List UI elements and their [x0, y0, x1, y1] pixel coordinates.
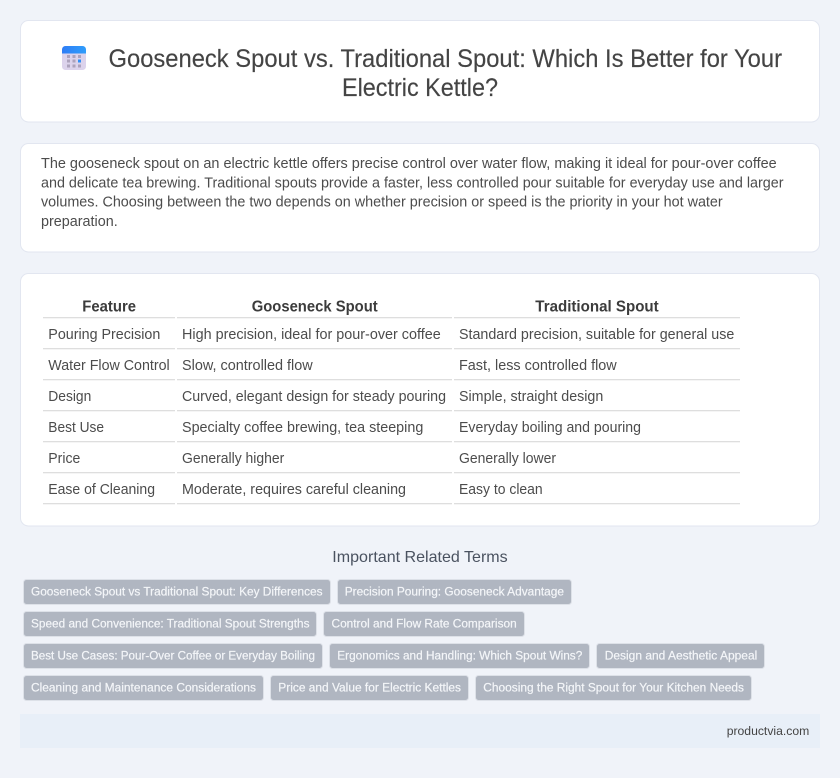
footer — [20, 714, 820, 748]
table row: price — [43, 451, 740, 473]
table row: design: Simple, straight design — [459, 389, 603, 405]
tag: price and value — [270, 676, 468, 700]
tag: design and aesthetic appeal — [596, 644, 764, 668]
table row: water flow control: Fast, less controlled flow — [459, 358, 617, 374]
panel: comparison table — [20, 274, 820, 526]
tag: cleaning and maintenance — [24, 676, 264, 700]
tag: speed and convenience: Speed and Convenience: Traditional Spout Strengths — [31, 617, 310, 631]
text block: introduction paragraph: preparation. — [41, 214, 118, 230]
footer: productvia.com — [727, 724, 809, 738]
table row: pouring precision: Standard precision, suitable for general use — [459, 327, 734, 343]
tag: ergonomics and handling: Ergonomics and Handling: Which Spout Wins? — [337, 649, 583, 663]
table row: ease of cleaning: Easy to clean — [459, 482, 543, 498]
table row: best use — [43, 420, 740, 442]
table row: price: Generally lower — [459, 451, 556, 467]
tag: best use cases: Best Use Cases: Pour-Over Coffee or Everyday Boiling — [31, 649, 315, 663]
table row: price: Price — [48, 451, 80, 467]
table header row: Traditional Spout — [535, 299, 659, 316]
heading: important related terms: Important Related Terms — [332, 549, 508, 566]
table row: price: Generally higher — [182, 451, 284, 467]
table row: water flow control: Water Flow Control — [48, 358, 170, 374]
table header row: Gooseneck Spout — [252, 299, 378, 316]
tag: precision pouring — [338, 580, 572, 604]
table row: ease of cleaning — [43, 482, 740, 504]
icon: calendar — [62, 46, 86, 70]
table header row — [43, 299, 740, 318]
table row: design: Curved, elegant design for steady pouring — [182, 389, 446, 405]
tag: control and flow rate — [324, 612, 524, 636]
table row: pouring precision: Pouring Precision — [48, 327, 160, 343]
related terms tags — [24, 580, 764, 700]
tag: design and aesthetic appeal: Design and Aesthetic Appeal — [605, 649, 757, 663]
table row: water flow control — [43, 358, 740, 380]
tag: best use cases — [24, 644, 322, 668]
title: Electric Kettle? — [342, 74, 498, 102]
table row: ease of cleaning: Moderate, requires careful cleaning — [182, 482, 406, 498]
table row: design — [43, 389, 740, 411]
tag: price and value: Price and Value for Electric Kettles — [278, 681, 461, 695]
tag: choosing the right spout — [476, 676, 752, 700]
table row: design: Design — [48, 389, 91, 405]
title: Gooseneck Spout vs. Traditional Spout: Which Is Better for Your — [108, 45, 782, 73]
tag: choosing the right spout: Choosing the Right Spout for Your Kitchen Needs — [483, 681, 744, 695]
text block: introduction paragraph: and delicate tea brewing. Traditional spouts provide a faster, less controlled pour suitable for everyday use and larger — [41, 175, 784, 191]
text block: introduction paragraph: volumes. Choosing between the two depends on whether precision or speed is the priority in your hot water — [41, 195, 723, 211]
table row: water flow control: Slow, controlled flow — [182, 358, 313, 374]
table row: best use: Specialty coffee brewing, tea steeping — [182, 420, 423, 436]
table row: best use: Everyday boiling and pouring — [459, 420, 641, 436]
panel: title header — [20, 20, 820, 122]
tag: ergonomics and handling — [330, 644, 590, 668]
tag: key differences — [24, 580, 330, 604]
panel: introduction — [20, 144, 820, 252]
table row: best use: Best Use — [48, 420, 104, 436]
table row: ease of cleaning: Ease of Cleaning — [48, 482, 155, 498]
tag: control and flow rate: Control and Flow Rate Comparison — [332, 617, 517, 631]
tag: cleaning and maintenance: Cleaning and Maintenance Considerations — [31, 681, 256, 695]
title — [108, 45, 782, 102]
table row: pouring precision: High precision, ideal for pour-over coffee — [182, 327, 441, 343]
tag: key differences: Gooseneck Spout vs Traditional Spout: Key Differences — [31, 585, 322, 599]
text block: introduction paragraph: The gooseneck spout on an electric kettle offers precise control over water flow, making it ideal for pour-over coffee — [41, 156, 777, 172]
tag: speed and convenience — [24, 612, 316, 636]
tag: precision pouring: Precision Pouring: Gooseneck Advantage — [345, 585, 564, 599]
table row: pouring precision — [43, 327, 740, 349]
text block: introduction paragraph — [41, 156, 784, 230]
table header row: Feature — [82, 299, 136, 316]
